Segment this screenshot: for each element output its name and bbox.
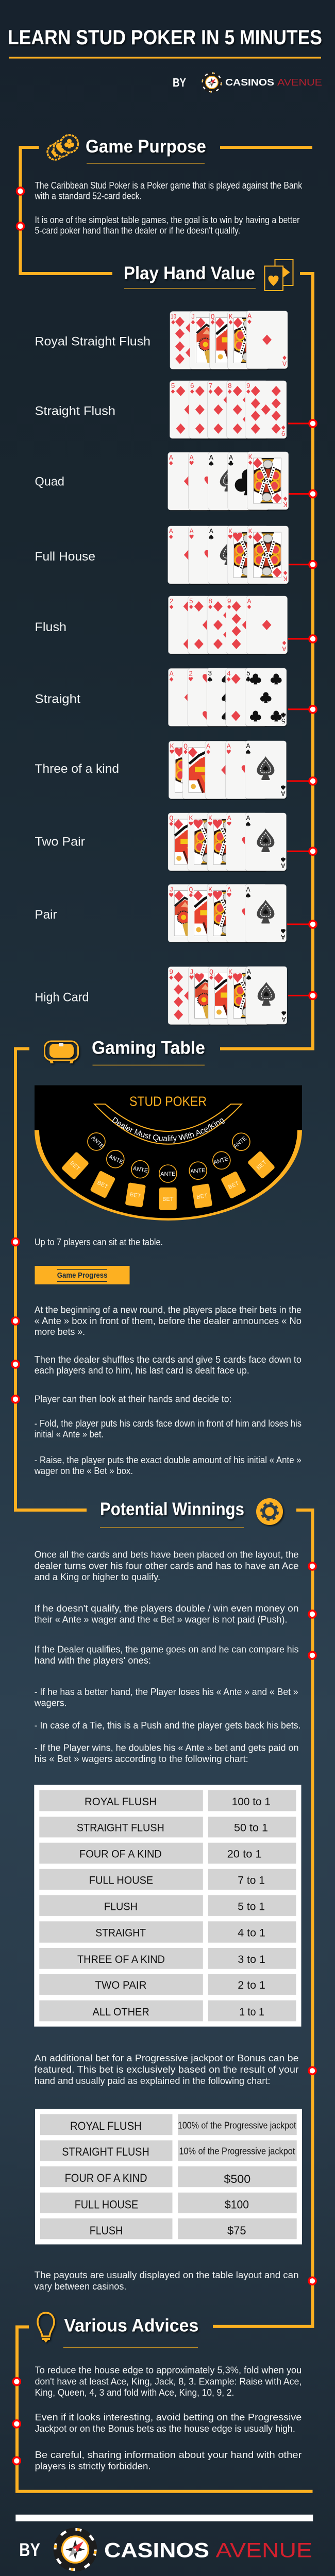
text: advice list: Be careful, sharing information about your hand with other	[35, 2450, 301, 2460]
row: flush	[35, 596, 316, 655]
table: payout chart	[34, 1785, 301, 2027]
table: payout chart: FULL HOUSE	[89, 1875, 153, 1887]
diagram: stud poker table: ANTE	[90, 1135, 105, 1150]
row: two pair: Two Pair	[35, 835, 85, 849]
table: payout chart: 50 to 1	[234, 1822, 268, 1834]
table: payout chart: 3 to 1	[238, 1954, 265, 1965]
text: dealer qualification: hand with the players' ones:	[35, 1655, 151, 1666]
row: quad: K	[283, 500, 288, 507]
row: royal straight flush: A	[282, 359, 287, 367]
text: dealer qualification: wagers.	[34, 1698, 67, 1708]
row: straight: 3	[208, 670, 212, 678]
row: high card: J	[190, 969, 194, 977]
icon: poker chips	[47, 135, 78, 160]
footer logo band	[15, 2515, 313, 2576]
text: game progress steps: - Raise, the player puts the exact double amount of his initial « Ante »	[35, 1455, 301, 1465]
row: three of a kind: A	[206, 743, 211, 751]
row: full house: A	[169, 528, 174, 536]
text: payouts note	[35, 2270, 298, 2292]
row: flush: 2	[170, 598, 174, 606]
row: three of a kind: K	[170, 743, 174, 751]
table: payout chart: TWO PAIR	[95, 1979, 146, 1991]
icon: two cards	[265, 260, 293, 291]
text: game progress steps: initial « Ante » bet.	[35, 1429, 104, 1439]
row: full house: Full House	[35, 550, 95, 564]
logo: by casinos avenue: CASINOS	[225, 77, 274, 88]
text: advice list: don't have at least Ace, King, Jack, 8, 3. Example: Raise with Ace,	[35, 2376, 301, 2386]
row: three of a kind: A	[280, 789, 285, 796]
row: pair: J	[169, 886, 173, 894]
text: payouts note: vary between casinos.	[35, 2281, 126, 2292]
row: straight: 5	[246, 670, 250, 678]
logo: by casinos avenue: BY	[173, 76, 186, 89]
row: straight flush: 8	[228, 383, 232, 391]
row: pair: Q	[189, 886, 193, 894]
row: straight flush: 7	[208, 383, 213, 391]
text: game progress steps: At the beginning of a new round, the players place their bets in the	[35, 1305, 301, 1315]
text: dealer qualification: If he doesn't qualify, the players double / win even money on	[35, 1603, 298, 1614]
text: advice list: King, Queen, 4, 3 and fold with Ace, King, 10, 9, 2.	[35, 2387, 234, 2398]
row: high card	[35, 967, 316, 1025]
table: payout chart: STRAIGHT FLUSH	[77, 1822, 164, 1834]
row: full house	[35, 526, 316, 585]
diagram: stud poker table	[35, 1085, 302, 1221]
table: progressive chart: FLUSH	[90, 2224, 123, 2237]
table: progressive chart: $100	[225, 2198, 249, 2211]
row: high card: A	[281, 1014, 286, 1022]
text: dealer qualification: - In case of a Tie, this is a Push and the player gets back his bets.	[35, 1720, 301, 1731]
row: full house: K	[283, 574, 288, 582]
ante circles	[88, 1133, 250, 1182]
row: flush: Flush	[35, 620, 66, 634]
heading: game purpose: Game Purpose	[86, 137, 206, 157]
text: game progress steps	[34, 1305, 301, 1476]
table: payout chart: 7 to 1	[238, 1875, 265, 1887]
footer logo band: BY	[19, 2540, 40, 2560]
table: payout chart: 4 to 1	[238, 1927, 265, 1939]
row: straight flush: Straight Flush	[35, 404, 115, 418]
text: dealer qualification: his « Bet » wagers according to the following chart:	[35, 1754, 248, 1764]
row: full house: K	[228, 528, 233, 536]
text: dealer qualification: and a King or higher to qualify.	[35, 1572, 160, 1582]
table: payout chart: ALL OTHER	[93, 2006, 149, 2018]
row: two pair: A	[227, 815, 232, 823]
bet boxes: BET	[69, 1160, 81, 1172]
text: advice list: players is strictly forbidden.	[35, 2461, 151, 2471]
row: two pair	[35, 813, 316, 872]
row: two pair: K	[208, 815, 213, 823]
text: dealer qualification: dealer turns over his four other cards and has to have an Ace	[35, 1561, 298, 1571]
diagram: stud poker table: ANTE	[190, 1167, 206, 1175]
diagram: stud poker table: ANTE	[213, 1156, 229, 1166]
text: game progress steps: « Ante » box in front of them, before the dealer announces « No	[35, 1316, 301, 1326]
text: advice list: Jackpot or on the Bonus bets as the house edge is usually high.	[35, 2424, 295, 2434]
table: payout chart: ROYAL FLUSH	[85, 1796, 157, 1808]
table: progressive chart: ROYAL FLUSH	[70, 2120, 142, 2132]
diagram: stud poker table: BET	[256, 1159, 268, 1171]
footer logo band: CASINOS	[104, 2539, 209, 2562]
row: straight flush: 9	[246, 383, 250, 391]
row: straight: 2	[189, 671, 193, 678]
diagram: stud poker table: BET	[96, 1180, 109, 1190]
row: full house: A	[190, 528, 194, 536]
text: payouts note: The payouts are usually displayed on the table layout and can	[35, 2270, 298, 2280]
table: payout chart: 5 to 1	[238, 1901, 265, 1912]
row: royal straight flush	[35, 311, 288, 370]
text: progressive bet	[35, 2053, 299, 2086]
diagram: stud poker table: Dealer Must Qualify With Ace/King	[112, 1117, 225, 1143]
row: pair: A	[246, 886, 250, 894]
text: progressive bet: featured. This bet is exclusively based on the result of your	[35, 2064, 299, 2075]
table: progressive chart: $500	[224, 2173, 250, 2185]
row: pair: Pair	[35, 908, 57, 922]
text: dealer qualification: - If he has a better hand, the Player loses his « Ante » and « Bet »	[35, 1687, 298, 1697]
table: progressive chart: 100% of the Progressive jackpot	[178, 2121, 296, 2131]
diagram: stud poker table: STUD POKER	[129, 1094, 207, 1109]
heading: potential winnings: Potential Winnings	[100, 1499, 244, 1519]
text: game progress steps: Player can then look at their hands and decide to:	[35, 1394, 231, 1404]
row: high card: High Card	[35, 991, 89, 1005]
logo: by casinos avenue: AVENUE	[277, 77, 322, 88]
row: two pair: K	[189, 815, 193, 823]
text: advice list: To reduce the house edge to approximately 5,3%, fold when you	[35, 2365, 301, 2375]
text: purpose intro: with a standard 52-card deck.	[35, 191, 142, 201]
row: royal straight flush: Royal Straight Flush	[35, 335, 150, 349]
text: purpose intro	[35, 180, 303, 236]
table: payout chart: 100 to 1	[232, 1796, 271, 1808]
diagram: stud poker table: ANTE	[108, 1154, 124, 1165]
bet boxes	[61, 1151, 89, 1180]
row: straight: A	[170, 671, 174, 678]
table: progressive chart: 10% of the Progressive jackpot	[179, 2146, 295, 2157]
row: royal straight flush: 10	[171, 313, 176, 321]
text: advice list: Even if it looks interesting, avoid betting on the Progressive	[35, 2412, 301, 2422]
text: game progress steps: each players and to him, his last card is dealt face up.	[35, 1365, 249, 1376]
text: game progress steps: wager on the « Bet » box.	[34, 1466, 133, 1476]
table: progressive chart: STRAIGHT FLUSH	[62, 2145, 149, 2158]
text: game progress steps: - Fold, the player puts his cards face down in front of him and loses his	[35, 1418, 301, 1429]
diagram: stud poker table: ANTE	[232, 1136, 248, 1150]
diagram: stud poker table: ANTE	[160, 1171, 175, 1177]
text: dealer qualification: - If the Player wins, he doubles his « Ante » bet and gets paid on	[35, 1742, 298, 1753]
row: full house: K	[248, 528, 253, 536]
diagram: stud poker table: BET	[162, 1196, 174, 1202]
diagram: stud poker table: BET	[196, 1193, 208, 1200]
row: high card: K	[228, 969, 233, 977]
panel: various advices	[13, 2313, 301, 2471]
row: royal straight flush: J	[191, 313, 195, 321]
table: progressive chart	[35, 2109, 302, 2244]
row: quad: K	[248, 454, 253, 462]
heading: various advices: Various Advices	[64, 2315, 198, 2336]
row: straight: 5	[281, 716, 286, 724]
text: game progress steps: more bets ».	[35, 1327, 85, 1337]
row: royal straight flush: Q	[211, 313, 215, 321]
panel: play hand value	[35, 260, 316, 1025]
button: game progress	[35, 1266, 130, 1284]
row: quad: A	[169, 454, 174, 462]
row: three of a kind: A	[227, 743, 231, 751]
row: straight flush	[35, 381, 316, 439]
diagram: stud poker table: ANTE	[132, 1165, 148, 1174]
panel: game purpose	[16, 135, 303, 236]
table: payout chart: FOUR OF A KIND	[79, 1849, 162, 1860]
row: quad: Quad	[35, 475, 64, 489]
row: royal straight flush: A	[247, 313, 252, 320]
table: payout chart: 2 to 1	[238, 1979, 265, 1991]
logo: by casinos avenue	[173, 72, 322, 93]
row: three of a kind: Q	[183, 743, 188, 751]
row: three of a kind	[35, 741, 316, 800]
table: payout chart: 1 to 1	[239, 2006, 264, 2018]
text: dealer qualification: their « Ante » wager and the « Bet » wager is not paid (Push).	[35, 1614, 287, 1624]
row: straight: 4	[227, 671, 231, 678]
icon: light bulb	[38, 2313, 54, 2343]
text: dealer qualification: Once all the cards and bets have been placed on the layout, the	[35, 1549, 298, 1560]
row: flush: A	[281, 644, 287, 652]
table: progressive chart: FOUR OF A KIND	[65, 2172, 147, 2184]
row: high card: Q	[209, 969, 213, 977]
row: full house: A	[209, 528, 214, 536]
row: flush: A	[247, 598, 252, 606]
button: game progress: Game Progress	[57, 1271, 107, 1280]
row: straight flush: 9	[281, 429, 286, 436]
row: pair	[35, 884, 316, 943]
text: purpose intro: The Caribbean Stud Poker is a Poker game that is played against the Bank	[35, 180, 303, 191]
text: dealer qualification	[34, 1549, 301, 1764]
row: three of a kind: A	[246, 743, 250, 751]
text: progressive bet: hand and usually paid as explained in the following chart:	[35, 2076, 270, 2086]
text: dealer qualification: If the Dealer qualifies, the game goes on and he can compare his	[35, 1644, 298, 1654]
row: flush: 9	[227, 598, 231, 606]
row: straight: Straight	[35, 692, 80, 706]
row: pair: A	[227, 886, 232, 894]
icon: gear	[256, 1498, 283, 1525]
table: payout chart: STRAIGHT	[95, 1927, 146, 1939]
row: three of a kind: Three of a kind	[35, 762, 119, 776]
heading: gaming table: Gaming Table	[92, 1038, 205, 1058]
row: pair: A	[280, 933, 285, 940]
row: straight flush: 6	[190, 383, 194, 391]
row: high card: 9	[169, 969, 173, 977]
row: royal straight flush: K	[229, 313, 233, 321]
text: purpose intro: 5-card poker hand than the dealer or if he doesn't qualify.	[35, 226, 240, 236]
row: quad	[35, 452, 316, 511]
text: seats: Up to 7 players can sit at the table.	[35, 1237, 163, 1247]
table: payout chart: FLUSH	[104, 1901, 138, 1912]
row: two pair: A	[246, 815, 250, 823]
diagram: stud poker table: BET	[129, 1192, 141, 1199]
table: payout chart: 20 to 1	[227, 1849, 262, 1860]
row: straight flush: 5	[171, 383, 175, 391]
heading: play hand value: Play Hand Value	[124, 263, 255, 283]
row: two pair: Q	[169, 815, 173, 823]
row: two pair: A	[280, 861, 285, 869]
diagram: stud poker table: BET	[227, 1180, 240, 1191]
text: purpose intro: It is one of the simplest table games, the goal is to win by having a better	[35, 215, 300, 225]
table: payout chart: THREE OF A KIND	[77, 1954, 165, 1965]
row: quad: A	[229, 454, 233, 462]
panel: gaming table	[11, 1038, 302, 1476]
panel: potential winnings	[34, 1498, 316, 2292]
row: flush: 8	[208, 598, 212, 606]
icon: table	[44, 1041, 78, 1063]
row: pair: K	[208, 886, 213, 894]
table: progressive chart: $75	[227, 2224, 246, 2237]
row: quad: A	[190, 454, 194, 462]
row: quad: A	[209, 454, 214, 462]
text: advice list	[35, 2365, 301, 2471]
footer logo band: AVENUE	[216, 2539, 312, 2562]
table: progressive chart: FULL HOUSE	[75, 2198, 138, 2211]
row: flush: 5	[189, 598, 193, 606]
text: progressive bet: An additional bet for a Progressive jackpot or Bonus can be	[35, 2053, 298, 2063]
row: high card: A	[247, 969, 252, 976]
text: game progress steps: Then the dealer shuffles the cards and give 5 cards face down to	[35, 1354, 301, 1365]
row: straight	[35, 668, 316, 727]
